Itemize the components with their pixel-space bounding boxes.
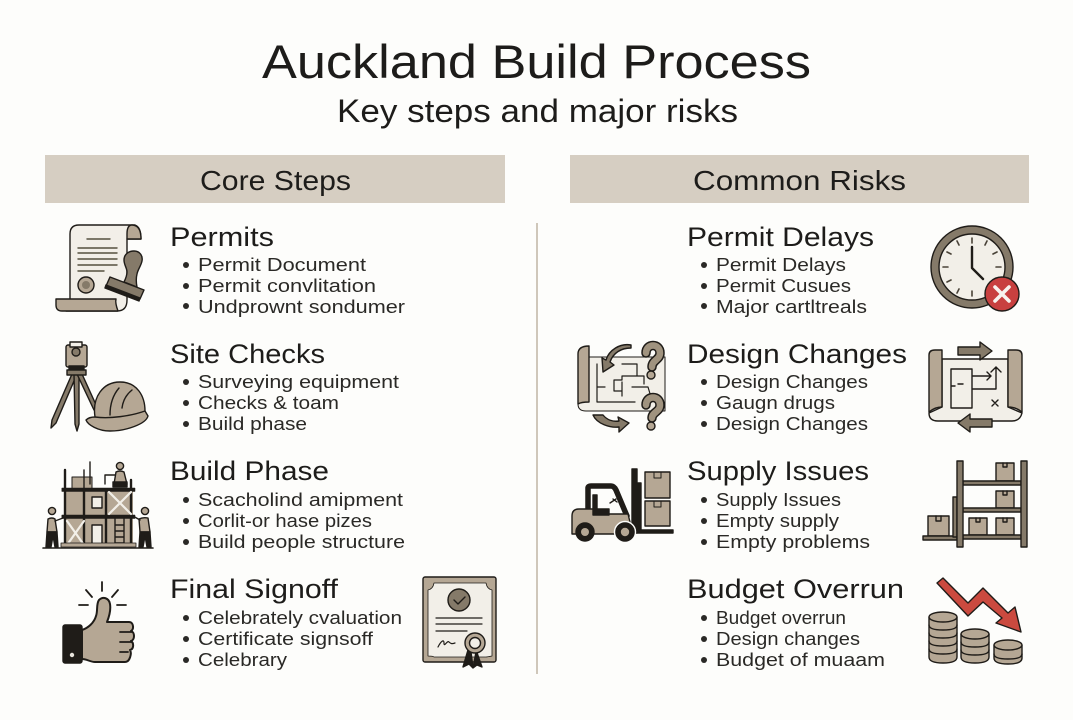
step text: final signoff: Final Signoff [170,574,339,604]
step text: final signoff [170,574,402,670]
heading: core steps [45,155,505,203]
step text: site checks: Build phase [198,414,307,434]
step text: build phase: Scacholind amipment [198,490,403,510]
subtitle: Key steps and major risks [337,93,738,129]
step text: build phase: Build Phase [170,456,329,486]
heading: core steps: Core Steps [200,165,351,196]
icon: permit scroll and stamp [56,225,144,311]
step text: supply issues: Supply Issues [687,456,869,486]
title: Auckland Build Process [262,35,811,88]
icon: scaffolding and workers [43,462,153,548]
step text: build phase [170,456,405,552]
step text: budget overrun: Budget Overrun [687,574,904,604]
step text: permits: Undprownt sondumer [198,297,405,317]
step text: site checks: Site Checks [170,339,325,369]
step text: permit delays [687,222,874,317]
heading: common risks [570,155,1029,203]
step text: permits: Permit convlitation [198,276,376,296]
step text: design changes: Design Changes [716,372,868,392]
step text: supply issues: Empty supply [716,511,839,531]
step text: final signoff: Celebrary [198,650,287,670]
icon: warehouse shelves [923,461,1027,547]
step text: build phase: Corlit-or hase pizes [198,511,372,531]
step text: build phase: Build people structure [198,532,405,552]
heading: common risks: Common Risks [693,165,906,196]
step text: design changes: Gaugn drugs [716,393,835,413]
icon: revised blueprint with arrows [929,342,1022,432]
step text: supply issues [687,456,870,552]
step text: permits [170,222,405,317]
step text: permits: Permits [170,222,274,252]
icon: floor plan with question marks [578,345,665,432]
step text: budget overrun: Budget of muaam [716,650,885,670]
step text: final signoff: Certificate signsoff [198,629,374,649]
step text: supply issues: Supply Issues [716,490,841,510]
icon: certificate with ribbon [423,577,496,668]
step text: permit delays: Major cartltreals [716,297,867,317]
step text: permits: Permit Document [198,255,366,275]
step text: design changes [687,339,907,434]
icon: clock with cross [931,226,1019,311]
step text: design changes: Design Changes [716,414,868,434]
step text: design changes: Design Changes [687,339,907,369]
icon: falling arrow over coin stacks [929,578,1022,664]
step text: permit delays: Permit Cusues [716,276,851,296]
panel: core steps [43,155,505,670]
step text: supply issues: Empty problems [716,532,870,552]
step text: permit delays: Permit Delays [716,255,846,275]
step text: site checks [170,339,399,434]
icon: thumbs up [63,582,134,663]
step text: site checks: Surveying equipment [198,372,399,392]
step text: site checks: Checks & toam [198,393,339,413]
icon: forklift with boxes [572,469,673,542]
icon: surveying tripod and hard hat [51,342,148,431]
step text: permit delays: Permit Delays [687,222,874,252]
step text: budget overrun: Budget overrun [716,608,846,628]
panel: common risks [570,155,1029,670]
step text: budget overrun: Design changes [716,629,860,649]
step text: final signoff: Celebrately cvaluation [198,608,402,628]
step text: budget overrun [687,574,904,670]
